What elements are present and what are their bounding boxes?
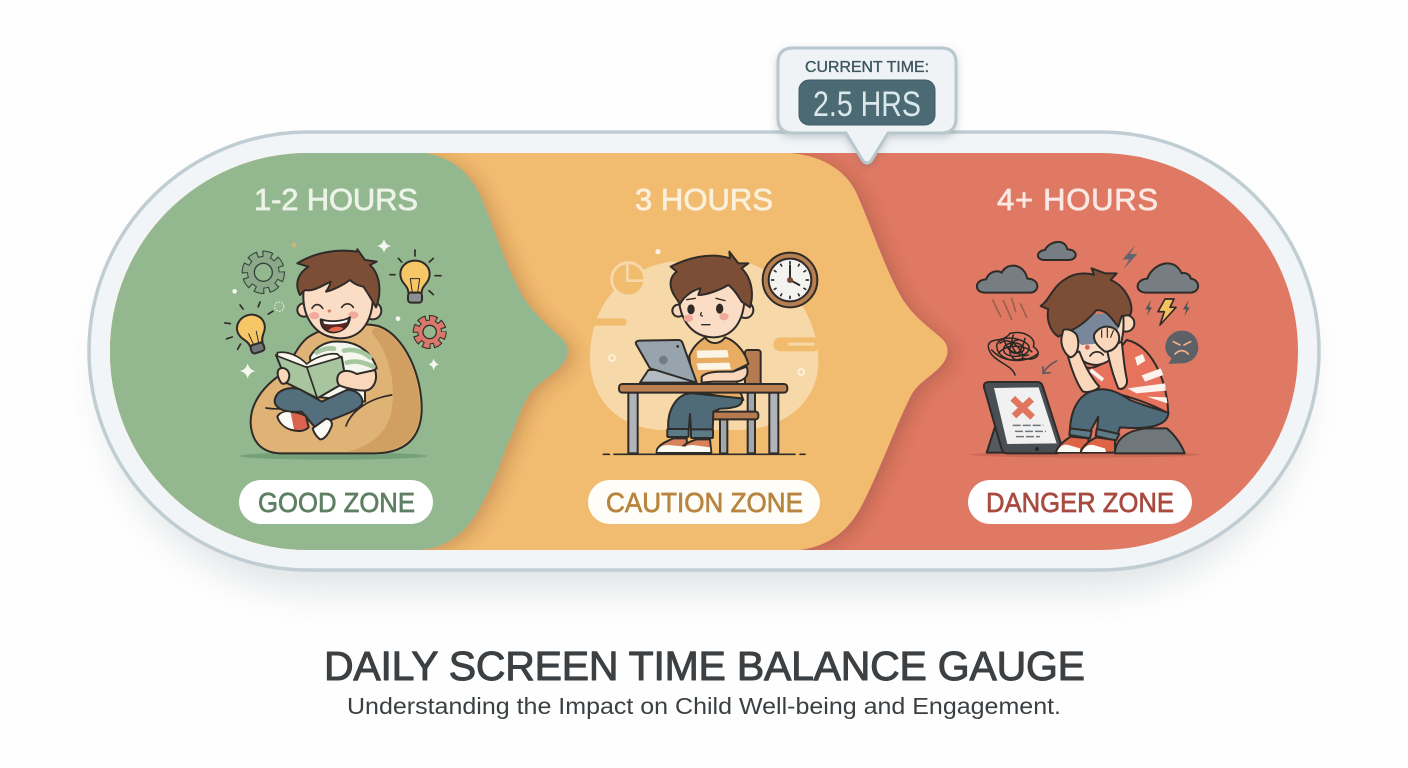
wall clock bbox=[763, 253, 817, 307]
illustration: distressed child with storm clouds bbox=[970, 242, 1200, 458]
gauge outer frame bbox=[89, 132, 1319, 570]
ground line bbox=[603, 452, 805, 457]
motion lines bbox=[590, 318, 820, 351]
good zone label bbox=[239, 480, 433, 524]
shoes bbox=[277, 412, 332, 439]
sparkles bbox=[232, 239, 439, 379]
bean bag bbox=[251, 324, 422, 453]
danger heading: 4+ HOURS bbox=[997, 182, 1158, 217]
shirt bbox=[310, 342, 377, 402]
danger zone label: DANGER ZONE bbox=[986, 487, 1174, 518]
storm clouds bbox=[977, 242, 1198, 293]
good heading: 1-2 HOURS bbox=[254, 182, 418, 217]
caution zone label: CAUTION ZONE bbox=[606, 487, 803, 518]
digital display: 2.5 HRS bbox=[813, 85, 921, 124]
jean cuffs and shoes bbox=[657, 429, 713, 453]
infographic canvas bbox=[87, 46, 1321, 719]
good zone label: GOOD ZONE bbox=[258, 487, 415, 518]
chair bbox=[688, 350, 761, 453]
ground shadow bbox=[970, 452, 1200, 458]
danger segment bbox=[100, 150, 1310, 560]
lightbulb right bbox=[390, 250, 441, 303]
ground shadow bbox=[239, 452, 427, 460]
danger zone label bbox=[968, 480, 1192, 524]
callout bubble bbox=[778, 48, 956, 163]
scribble bbox=[988, 333, 1038, 375]
pie chart icon bbox=[612, 263, 645, 296]
arm and hand bbox=[702, 367, 748, 383]
tablet bbox=[984, 382, 1061, 453]
gauge drop shadow bbox=[105, 165, 1305, 590]
small arrow bbox=[1043, 361, 1057, 373]
illustration: happy child reading on bean bag bbox=[218, 239, 443, 460]
jeans bbox=[1070, 389, 1168, 439]
head bbox=[1041, 268, 1134, 365]
gauge bbox=[89, 132, 1319, 590]
jeans bbox=[275, 388, 362, 427]
zone: danger bbox=[968, 182, 1200, 524]
gear red bbox=[416, 319, 443, 345]
head bbox=[297, 249, 381, 338]
callout label: CURRENT TIME: bbox=[805, 59, 929, 76]
caution heading: 3 HOURS bbox=[635, 182, 773, 217]
lightbulb left bbox=[218, 296, 284, 360]
desk bbox=[619, 384, 787, 453]
good segment bbox=[100, 150, 568, 560]
title: DAILY SCREEN TIME BALANCE GAUGE bbox=[324, 643, 1085, 689]
arms and hands bbox=[1061, 327, 1127, 392]
lightning bolts bbox=[1123, 245, 1190, 325]
caution segment bbox=[100, 150, 948, 560]
jeans bbox=[668, 393, 742, 431]
caution zone label bbox=[588, 480, 820, 524]
book bbox=[276, 352, 346, 398]
subtitle: Understanding the Impact on Child Well-being and Engagement. bbox=[347, 693, 1061, 719]
shirt bbox=[1083, 340, 1168, 413]
cuffs and shoes bbox=[1056, 428, 1119, 453]
backdrop blob bbox=[590, 262, 818, 430]
shirt bbox=[689, 337, 748, 400]
illustration: child at laptop with clock bbox=[590, 249, 820, 454]
hands and arm bbox=[278, 368, 376, 391]
gauge segments bbox=[100, 150, 1310, 560]
tablet bbox=[636, 340, 697, 383]
rock bbox=[1115, 428, 1185, 453]
rain streaks bbox=[993, 298, 1027, 319]
angry speech bubble bbox=[1165, 331, 1198, 364]
zone: caution bbox=[588, 182, 820, 524]
zone: good bbox=[218, 182, 443, 524]
gear green bbox=[246, 255, 281, 290]
head bbox=[671, 252, 753, 337]
callout: current time bbox=[778, 48, 956, 163]
